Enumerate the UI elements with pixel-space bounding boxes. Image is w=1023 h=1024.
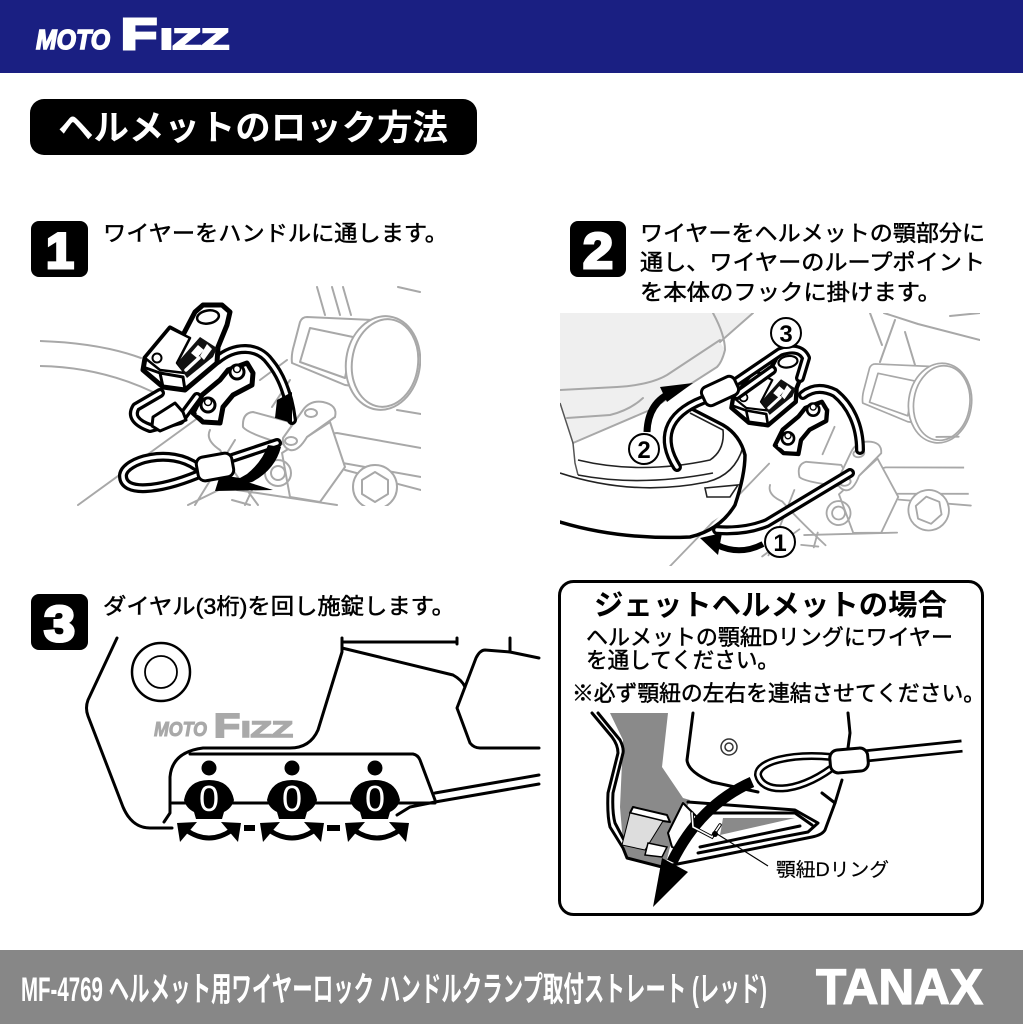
footer band (0, 950, 1023, 1024)
marker 3: 3 (779, 321, 793, 348)
step 2 text: を本体のフックに掛けます。 (640, 280, 941, 305)
marker 1 (765, 527, 795, 557)
illustration: wire through helmet chin (560, 313, 980, 578)
step 2 number (570, 221, 626, 279)
dial 3: 0 (365, 778, 385, 819)
panel instructions (586, 625, 953, 673)
panel heading: ジェットヘルメットの場合 (594, 589, 947, 622)
arrow 2 (647, 383, 693, 432)
dial 2: 0 (282, 778, 302, 819)
illustration: wire through handlebar (40, 287, 426, 509)
dial 1: 0 (199, 778, 219, 819)
logo: MOTO FIZZ grey: F (214, 707, 240, 744)
logo: MOTO FIZZ: MOTO (36, 24, 110, 55)
illustration: D-ring (592, 713, 963, 907)
logo: MOTO FIZZ grey: MOTO (154, 719, 207, 741)
step 3 number: 3 (44, 596, 75, 652)
heading: ヘルメットのロック方法 (58, 109, 448, 148)
arrow 1 (700, 533, 763, 555)
step 1 number (31, 221, 88, 279)
step 2 text (640, 221, 985, 305)
arrow: wire direction (653, 782, 752, 907)
panel instructions: ヘルメットの顎紐Dリングにワイヤー (586, 625, 953, 650)
panel: jet helmet case (560, 582, 985, 914)
helmet (560, 313, 753, 443)
dial 2 (260, 760, 324, 842)
step 1 number: 1 (46, 223, 74, 279)
brand: TANAX: TANAX (816, 959, 983, 1015)
header band (0, 0, 1023, 73)
marker 3 (771, 318, 801, 348)
logo: MOTO FIZZ (36, 10, 229, 59)
logo: MOTO FIZZ grey: IZZ (241, 717, 293, 742)
arrow: wire direction (215, 445, 281, 491)
step 3 text: ダイヤル(3桁)を回し施錠します。 (103, 594, 455, 619)
step 3 number (31, 594, 88, 652)
illustration: dial lock (86, 638, 539, 842)
dial 1 (177, 760, 241, 842)
logo: MOTO FIZZ: IZZ (160, 24, 229, 56)
panel note: ※必ず顎紐の左右を連結させてください。 (572, 681, 985, 706)
marker 2: 2 (637, 437, 651, 464)
logo: MOTO FIZZ: F (121, 10, 157, 59)
marker 1: 1 (773, 530, 787, 557)
dial 3 (345, 760, 409, 842)
marker 2 (629, 434, 659, 464)
step 2 text: ワイヤーをヘルメットの顎部分に (640, 221, 985, 246)
step 2 text: 通し、ワイヤーのループポイント (640, 250, 985, 275)
logo: MOTO FIZZ grey (154, 707, 293, 744)
panel instructions: を通してください。 (586, 648, 779, 673)
step 1 text: ワイヤーをハンドルに通します。 (103, 221, 448, 246)
heading (30, 99, 477, 155)
step 2 number: 2 (583, 223, 613, 279)
D-ring label: 顎紐Dリング (776, 859, 889, 881)
